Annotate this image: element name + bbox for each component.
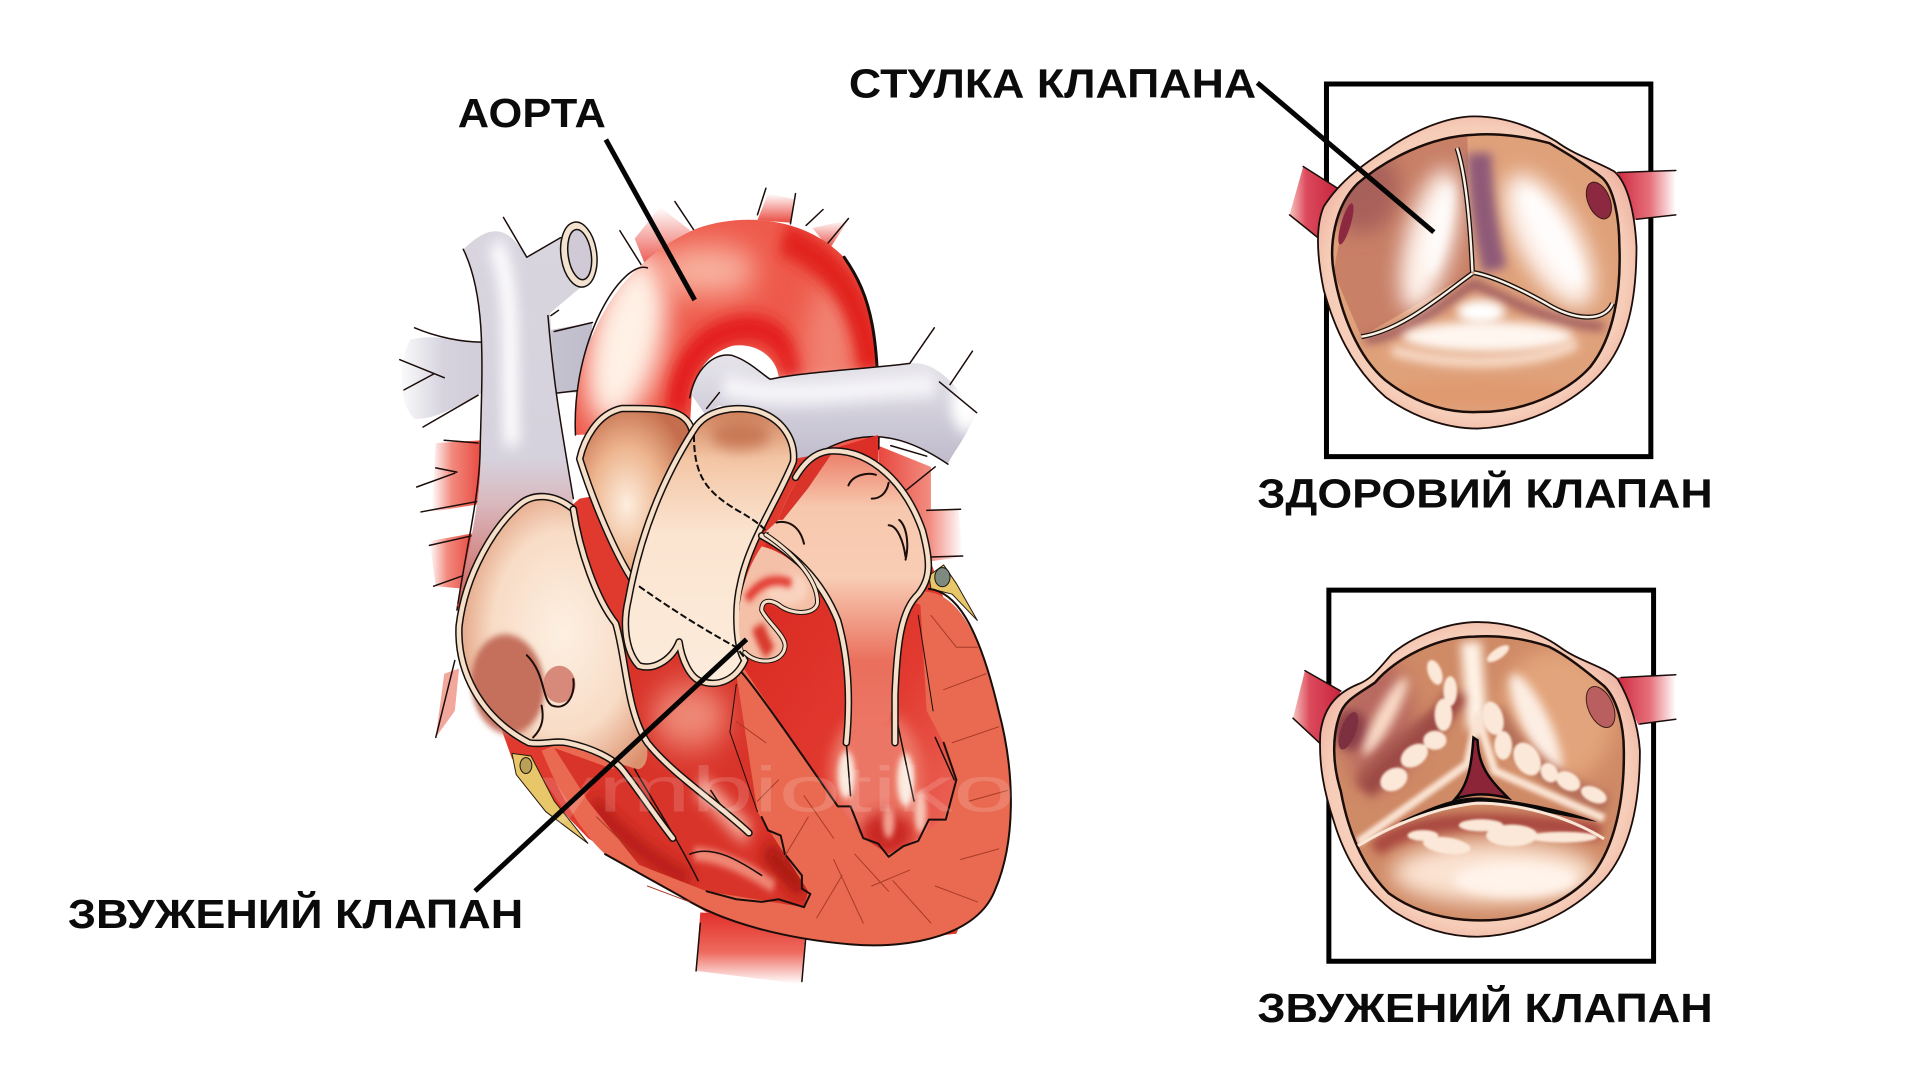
valve inner outline (1334, 636, 1624, 920)
heart body (457, 435, 1011, 944)
valve wall (1320, 622, 1640, 937)
pointer line: narrowed valve (475, 639, 747, 891)
left atrium (762, 451, 928, 743)
pulmonary artery (690, 328, 983, 469)
label: aorta: АОРТА (458, 90, 606, 136)
valve wall (1318, 116, 1636, 429)
dashed valve outlines (639, 435, 768, 658)
left pulmonary veins (400, 323, 592, 427)
right ventricle cavity (554, 671, 812, 908)
coronary ostia (1335, 179, 1616, 246)
right ventricular outflow lobe (580, 408, 692, 584)
myocardial fibres (597, 615, 1007, 923)
frame: stenotic valve (1329, 590, 1654, 961)
pointer line: aorta (606, 140, 695, 300)
narrowed central orifice (1358, 738, 1604, 846)
watermark: ymbiotiko (542, 755, 1016, 826)
aortic root lobe (625, 409, 794, 683)
valve inner outline (1332, 134, 1620, 412)
vessel ring opening (556, 218, 602, 291)
pointer line: valve leaflet (1257, 83, 1434, 232)
healthy valve panel (1290, 84, 1676, 457)
frame: healthy valve (1326, 84, 1651, 457)
connected vessels (1293, 671, 1676, 744)
calcium nodules (1376, 642, 1609, 857)
valve leaflets (1333, 136, 1618, 411)
myocardium (542, 589, 1011, 945)
stenotic valve panel (1293, 590, 1676, 961)
epicardial fat (512, 565, 978, 844)
left ventricle cavity (741, 541, 956, 857)
right atrium (459, 497, 749, 838)
label: valve leaflet: СТУЛКА КЛАПАНА (849, 61, 1256, 107)
heart illustration (400, 188, 1016, 984)
connected vessels (1290, 166, 1676, 238)
commissure lines (1361, 148, 1613, 337)
descending aorta (696, 913, 806, 984)
stenotic aortic valve (739, 535, 818, 661)
aortic arch (570, 220, 878, 462)
coronary ostia (1335, 682, 1621, 752)
caption: healthy valve: ЗДОРОВИЙ КЛАПАН (1257, 470, 1713, 516)
caption: narrowed valve: ЗВУЖЕНИЙ КЛАПАН (1257, 985, 1713, 1031)
label: narrowed valve left: ЗВУЖЕНИЙ КЛАПАН (68, 891, 523, 937)
small red vessels (417, 440, 963, 737)
calcified leaflets (1335, 638, 1623, 920)
aorta top branches (620, 188, 848, 271)
superior vena cava (457, 217, 588, 610)
